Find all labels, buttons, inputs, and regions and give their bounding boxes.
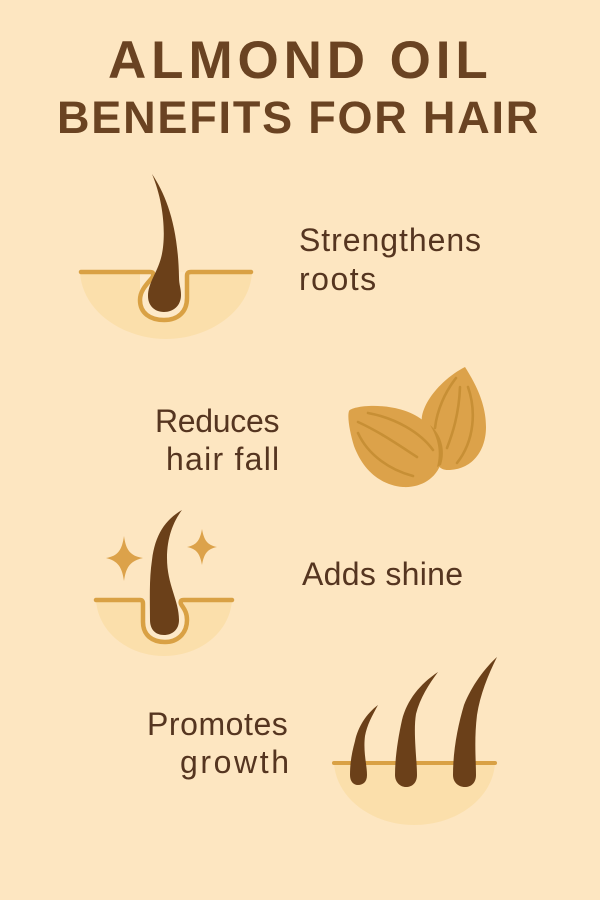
icon: almonds	[348, 367, 486, 487]
label: strengthens roots: Strengthens	[299, 222, 482, 258]
label: reduces hair fall: hair fall	[166, 441, 280, 477]
label: promotes growth: growth	[180, 744, 292, 780]
label: reduces hair fall: Reduces	[155, 403, 279, 439]
label: reduces hair fall	[155, 403, 280, 477]
label: promotes growth	[147, 706, 292, 780]
label: strengthens roots: roots	[299, 261, 378, 297]
icon: small sparkle	[187, 529, 217, 565]
label: promotes growth: Promotes	[147, 706, 288, 742]
title	[57, 31, 540, 143]
icon: large sparkle	[106, 536, 143, 581]
title: ALMOND OIL	[108, 31, 493, 90]
label: adds shine: Adds shine	[302, 556, 463, 592]
title: BENEFITS FOR HAIR	[57, 92, 540, 143]
icon: shiny hair with sparkles	[96, 510, 232, 656]
label: strengthens roots	[299, 222, 482, 297]
icon: hair growth	[334, 657, 497, 825]
icon: hair root strengthened	[80, 174, 252, 339]
